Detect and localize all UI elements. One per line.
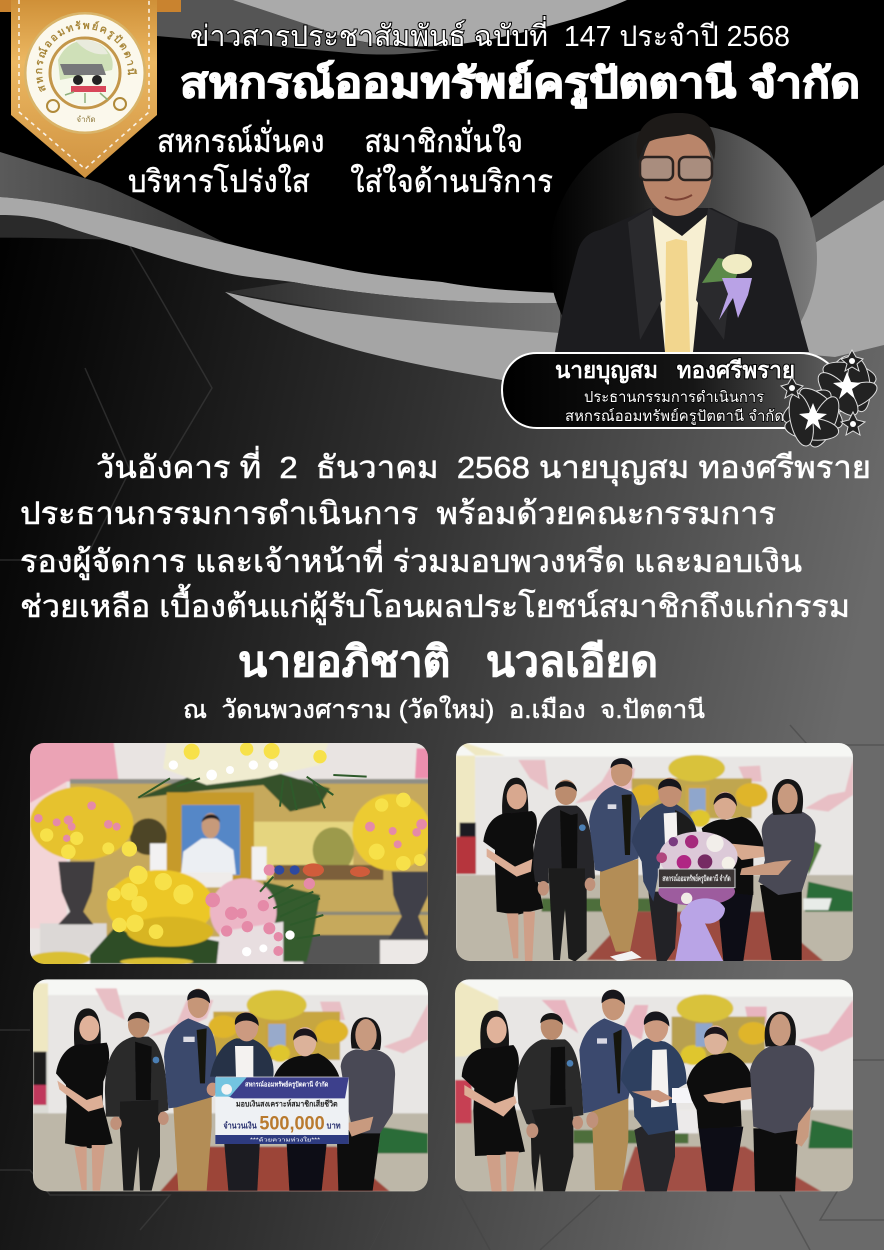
- woman left: [502, 778, 528, 814]
- logo: สหกรณ์ออมทรัพย์ครูปัตตานี: [36, 20, 138, 92]
- name plate: สหกรณ์ออมทรัพย์ครูปัตตานี จำกัด: [565, 408, 784, 425]
- wreath: [660, 832, 738, 868]
- man 3: [173, 1097, 212, 1191]
- woman 6: [760, 885, 802, 960]
- photo: group with donation board: [30, 977, 433, 1197]
- icon: plumeria flowers: [778, 350, 881, 451]
- main title: สหกรณ์ออมทรัพย์ครูปัตตานี จำกัด: [180, 60, 860, 109]
- ribbon badge: [0, 0, 181, 178]
- photo: group with wreath: [452, 740, 858, 966]
- name plate: ประธานกรรมการดำเนินการ: [584, 389, 764, 406]
- body text: รองผู้จัดการ และเจ้าหน้าที่ ร่วมมอบพวงหรีด และมอบเงิน: [20, 540, 802, 580]
- donation board: บาท: [327, 1121, 341, 1131]
- woman 5: [717, 892, 753, 961]
- donation board: [215, 1077, 349, 1144]
- man 4: [634, 1110, 675, 1192]
- motto: บริหารโปร่งใส ใส่ใจด้านบริการ: [128, 164, 553, 199]
- woman left: [480, 1011, 509, 1053]
- name plate: [502, 353, 850, 428]
- issue line: ข่าวสารประชาสัมพันธ์ ฉบับที่ 147 ประจำปี 2568: [190, 16, 790, 53]
- man 4: [648, 892, 678, 961]
- backdrop circle: [549, 124, 817, 392]
- body text: ประธานกรรมการดำเนินการ พร้อมด้วยคณะกรรมการ: [20, 496, 776, 531]
- woman 5: [287, 1143, 327, 1191]
- body text: [20, 446, 871, 625]
- man 2: [530, 1103, 573, 1192]
- donation board: มอบเงินสงเคราะห์สมาชิกเสียชีวิต: [236, 1099, 338, 1109]
- woman 5: [698, 1127, 743, 1192]
- portrait: [555, 113, 809, 352]
- location: ณ วัดนพวงศาราม (วัดใหม่) อ.เมือง จ.ปัตตานี: [183, 695, 705, 724]
- photo: memorial altar: [27, 740, 433, 966]
- corsage: [702, 254, 752, 320]
- logo: [24, 12, 146, 134]
- name plate: นายบุญสม ทองศรีพราย: [555, 357, 795, 385]
- man 3: [600, 859, 638, 952]
- body text: วันอังคาร ที่ 2 ธันวาคม 2568 นายบุญสม ทองศรีพราย: [96, 446, 871, 487]
- donation board: 500,000: [259, 1113, 325, 1134]
- man 2: [548, 867, 587, 962]
- motto: สหกรณ์มั่นคง สมาชิกมั่นใจ: [157, 120, 523, 159]
- woman 6: [753, 1128, 798, 1192]
- man 2: [118, 1098, 160, 1191]
- deceased name: นายอภิชาติ นวลเอียด: [238, 638, 658, 685]
- photo: handing envelope: [452, 977, 858, 1197]
- envelope: [672, 1088, 693, 1103]
- photo: group with wreath: สหกรณ์ออมทรัพย์ครูปัตตานี จำกัด: [662, 873, 731, 884]
- donation board: ***ด้วยความห่วงใย***: [250, 1137, 320, 1144]
- header swooshes: [0, 0, 884, 385]
- body text: ช่วยเหลือ เบื้องต้นแก่ผู้รับโอนผลประโยชน์สมาชิกถึงแก่กรรม: [20, 584, 850, 625]
- woman left: [74, 1008, 101, 1046]
- man 3: [592, 1098, 628, 1190]
- logo: จำกัด: [76, 115, 96, 124]
- man 4: [224, 1140, 260, 1191]
- donation board: จำนวนเงิน: [223, 1121, 257, 1131]
- donation board: สหกรณ์ออมทรัพย์ครูปัตตานี จำกัด: [245, 1081, 328, 1090]
- motto: [128, 120, 553, 199]
- woman 6: [337, 1130, 381, 1191]
